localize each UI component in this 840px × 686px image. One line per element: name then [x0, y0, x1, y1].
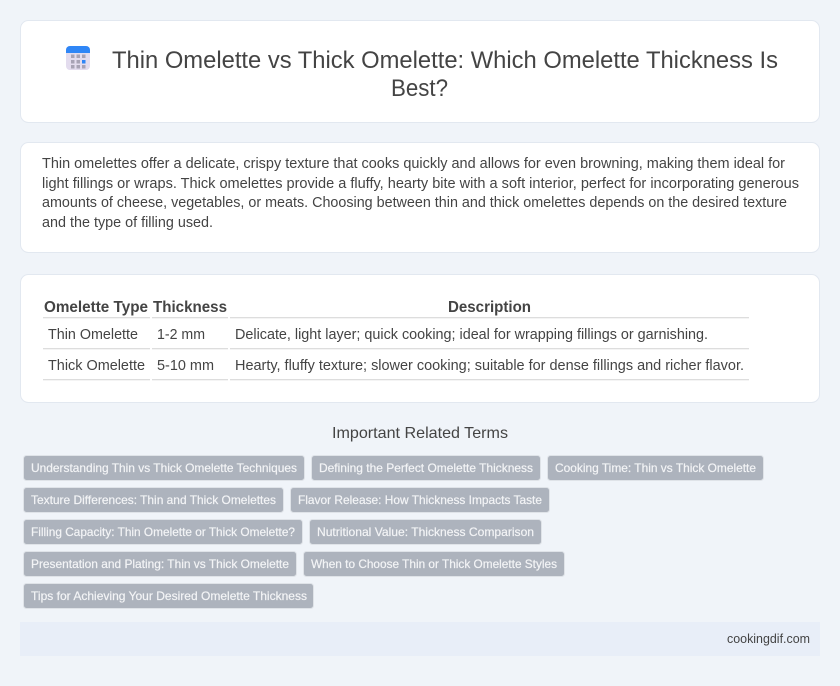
header panel: [20, 20, 820, 122]
table header: Description: [448, 299, 531, 316]
panel: summary paragraph: amounts of cheese, vegetables, or meats. Choosing between thin and thick omelettes depends on the desired texture: [42, 195, 787, 211]
related term tags: Tips for Achieving Your Desired Omelette Thickness: [31, 589, 307, 603]
related term tags: [24, 456, 764, 608]
title: Thin Omelette vs Thick Omelette: Which Omelette Thickness Is: [112, 47, 778, 74]
table row: thick omelette: Hearty, fluffy texture; slower cooking; suitable for dense fillings and richer flavor.: [235, 358, 744, 374]
table row: thin omelette: Thin Omelette: [48, 327, 138, 343]
table header: [44, 299, 531, 316]
related term tags: Nutritional Value: Thickness Comparison: [317, 525, 534, 539]
related term tags: When to Choose Thin or Thick Omelette Styles: [311, 557, 557, 571]
related term tags: Cooking Time: Thin vs Thick Omelette: [555, 461, 756, 475]
footer bar: [20, 622, 820, 656]
table row: thin omelette: 1-2 mm: [157, 327, 205, 343]
related term tags: Texture Differences: Thin and Thick Omelettes: [31, 493, 276, 507]
related term tags: Presentation and Plating: Thin vs Thick Omelette: [31, 557, 289, 571]
related term tags: Understanding Thin vs Thick Omelette Techniques: [31, 461, 297, 475]
table header: Omelette Type: [44, 299, 148, 316]
panel: summary paragraph: and the type of filling used.: [42, 215, 213, 231]
panel: summary paragraph: Thin omelettes offer a delicate, crispy texture that cooks quickly and allows for even browning, making them ideal for: [42, 156, 785, 172]
related term tags: Defining the Perfect Omelette Thickness: [319, 461, 533, 475]
table row: thick omelette: Thick Omelette: [48, 358, 145, 374]
table row: thick omelette: 5-10 mm: [157, 358, 214, 374]
heading: related terms: Important Related Terms: [332, 425, 508, 442]
panel: comparison table: [20, 274, 820, 402]
table row: thin omelette: Delicate, light layer; quick cooking; ideal for wrapping fillings or garnishing.: [235, 327, 708, 343]
related term tags: Flavor Release: How Thickness Impacts Taste: [298, 493, 542, 507]
footer bar: cookingdif.com: [727, 632, 810, 646]
panel: summary paragraph: [20, 142, 820, 252]
title: [112, 47, 778, 102]
panel: summary paragraph: light fillings or wraps. Thick omelettes provide a fluffy, hearty bite with a soft interior, perfect for incorporating generous: [42, 176, 799, 192]
related term tags: Filling Capacity: Thin Omelette or Thick Omelette?: [31, 525, 295, 539]
title: Best?: [391, 75, 448, 102]
table header: Thickness: [153, 299, 227, 316]
icon: calendar: [66, 46, 90, 70]
